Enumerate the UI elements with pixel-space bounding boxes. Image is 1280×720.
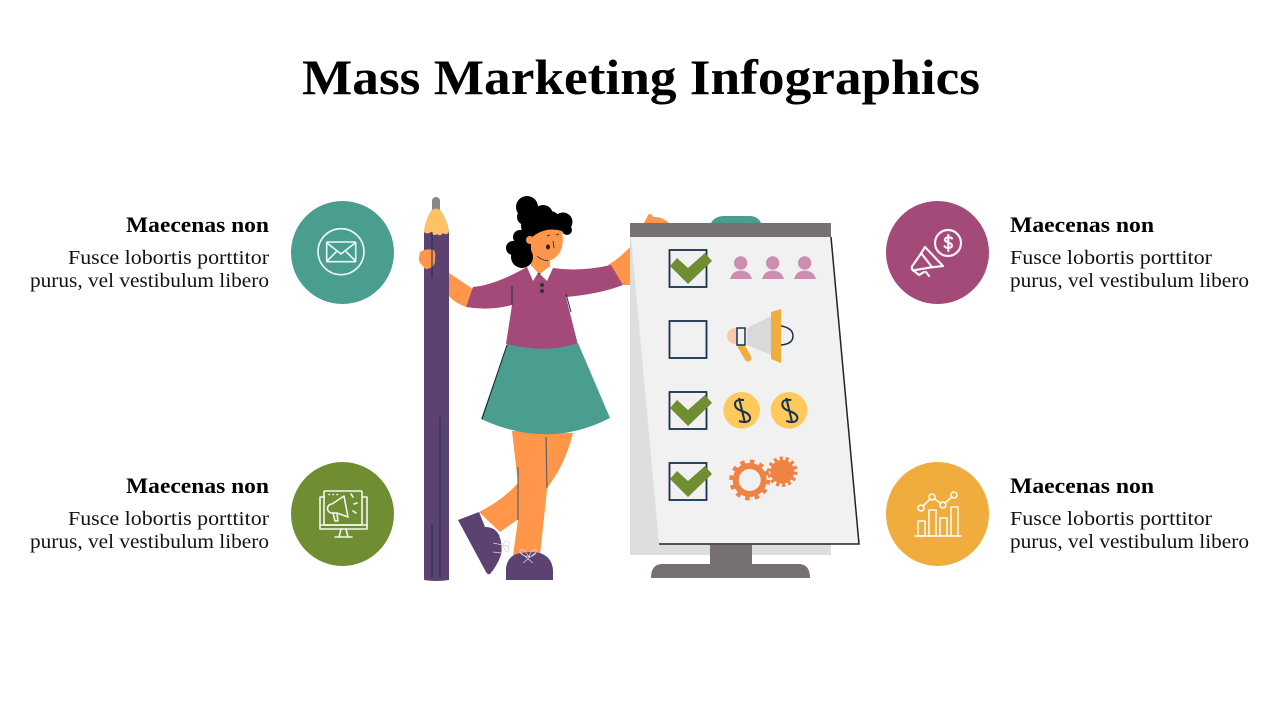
skirt xyxy=(481,343,610,434)
icon: megaphone with dollar coin xyxy=(912,230,961,276)
board sheet xyxy=(631,237,859,544)
board stand xyxy=(651,545,810,578)
hair xyxy=(506,196,572,268)
body text: top right xyxy=(1010,247,1249,292)
body text: top right: Fusce lobortis porttitor xyxy=(1010,247,1212,269)
megaphone icon xyxy=(727,309,793,363)
body text: top left: purus, vel vestibulum libero xyxy=(30,270,269,292)
panel: top right megaphone and dollar xyxy=(886,201,1249,304)
title: Mass Marketing Infographics xyxy=(302,49,980,105)
row 3: checked, coins xyxy=(670,392,807,429)
front shoe xyxy=(506,552,553,580)
neck xyxy=(531,250,550,274)
left arm and hand xyxy=(449,273,473,307)
body text: top left xyxy=(30,247,269,292)
green circle badge xyxy=(291,462,394,566)
row 4: checked, gears xyxy=(670,459,795,500)
right arm xyxy=(608,245,636,285)
dollar coins xyxy=(723,392,807,429)
collar xyxy=(527,264,553,281)
pencil line over hand xyxy=(431,232,433,278)
front leg xyxy=(512,431,547,555)
board handle xyxy=(709,216,763,228)
face xyxy=(531,230,563,261)
panel: bottom right chart xyxy=(886,462,1249,566)
body text: bottom right: Fusce lobortis porttitor xyxy=(1010,508,1212,530)
icon: monitor with megaphone xyxy=(320,491,367,537)
heading: top right: Maecenas non xyxy=(1010,212,1155,237)
icon: bar chart with trend line xyxy=(915,492,961,536)
leg lines xyxy=(518,437,547,520)
body text: top left: Fusce lobortis porttitor xyxy=(68,247,269,269)
illustration: checklist board xyxy=(630,216,859,578)
shoe laces xyxy=(493,541,536,563)
heading: bottom right: Maecenas non xyxy=(1010,473,1155,498)
body text: bottom left: Fusce lobortis porttitor xyxy=(68,508,269,530)
body text: bottom right xyxy=(1010,508,1249,553)
body text: bottom left: purus, vel vestibulum libero xyxy=(30,531,269,553)
row 2: unchecked, megaphone xyxy=(670,309,793,363)
board shadow xyxy=(630,235,831,555)
body text: top right: purus, vel vestibulum libero xyxy=(1010,270,1249,292)
body text: bottom right: purus, vel vestibulum libero xyxy=(1010,531,1249,553)
back leg xyxy=(479,431,573,532)
orange circle badge xyxy=(886,462,989,566)
back shoe xyxy=(458,512,502,574)
board top bar xyxy=(630,223,831,237)
icon: envelope xyxy=(318,229,364,275)
illustration: giant pencil xyxy=(424,197,449,581)
hand behind board xyxy=(643,214,670,224)
heading: bottom left: Maecenas non xyxy=(126,473,270,498)
purple circle badge xyxy=(886,201,989,304)
illustration: woman xyxy=(419,196,670,580)
panel: top left email xyxy=(30,201,394,304)
panel: bottom left monitor xyxy=(30,462,394,566)
heading: top left: Maecenas non xyxy=(126,212,270,237)
row 1: checked, people xyxy=(670,250,816,287)
people icons xyxy=(730,256,816,279)
teal circle badge xyxy=(291,201,394,304)
blouse xyxy=(466,265,623,349)
gears icon xyxy=(731,459,795,498)
body text: bottom left xyxy=(30,508,269,553)
blouse buttons and folds xyxy=(512,286,571,312)
